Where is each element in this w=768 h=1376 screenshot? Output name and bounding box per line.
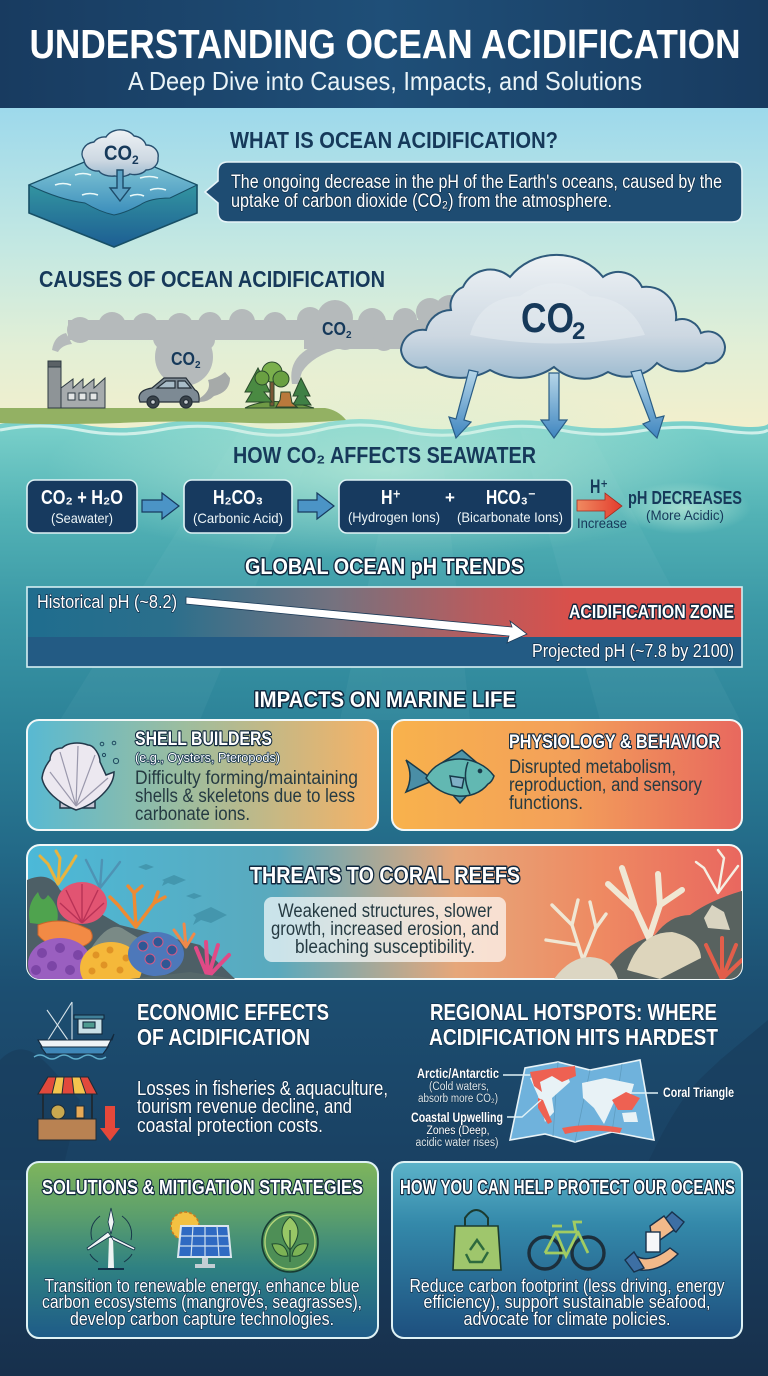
- icon: ocean cube with CO2 cloud: CO: [104, 142, 132, 165]
- heading: economic effects: [137, 999, 329, 1050]
- text box: coral threats: bleaching susceptibility.: [295, 937, 475, 958]
- chart: pH trend bar: [27, 587, 742, 667]
- heading: how CO2 affects seawater: HOW CO₂ AFFECTS SEAWATER: [233, 442, 536, 468]
- icon: solar panel and sun: [171, 1212, 231, 1268]
- label: coastal upwelling: Coastal Upwelling: [411, 1110, 503, 1125]
- economic effects text: Losses in fisheries & aquaculture,: [137, 1078, 388, 1100]
- text box: coral threats: Weakened structures, slower: [278, 901, 493, 922]
- box: carbonic acid: (Carbonic Acid): [193, 510, 283, 526]
- icon: factory: [48, 361, 105, 408]
- increase arrow with H+: H⁺: [590, 477, 608, 498]
- icon: fishing boat: [34, 1002, 114, 1059]
- background: sky: [0, 100, 768, 430]
- panel: solutions and mitigation: SOLUTIONS & MITIGATION STRATEGIES: [42, 1177, 363, 1199]
- icon: market stall with down arrow: [38, 1077, 120, 1141]
- callout: definition: uptake of carbon dioxide (CO₂) from the atmosphere.: [231, 191, 612, 212]
- text box: coral threats: growth, increased erosion, and: [271, 919, 499, 940]
- box: ions: (Hydrogen Ions): [348, 509, 440, 525]
- icon: ocean cube with CO2 cloud: [29, 130, 197, 247]
- increase arrow with H+: Increase: [577, 515, 627, 531]
- panel: how you can help: efficiency), support sustainable seafood,: [424, 1291, 710, 1312]
- heading: impacts on marine life: IMPACTS ON MARINE LIFE: [254, 687, 516, 712]
- economic effects text: tourism revenue decline, and: [137, 1096, 352, 1118]
- label: coral triangle: [630, 1085, 734, 1100]
- label: coastal upwelling: Zones (Deep,: [426, 1123, 490, 1137]
- box: carbonic acid: H₂CO₃: [213, 487, 263, 509]
- panel: shell builders: shells & skeletons due to less: [135, 786, 355, 807]
- result: pH decreases: (More Acidic): [646, 507, 724, 523]
- icon: voting hands: [625, 1212, 684, 1272]
- panel: threats to coral reefs: THREATS TO CORAL REEFS: [250, 862, 520, 888]
- increase arrow with H+: [577, 477, 627, 531]
- panel: physiology and behavior: Disrupted metabolism,: [509, 757, 676, 778]
- heading: global ocean pH trends: GLOBAL OCEAN pH TRENDS: [245, 554, 524, 579]
- panel: shell builders: Difficulty forming/maintaining: [135, 768, 358, 789]
- label: CO2 above car: CO: [171, 349, 195, 369]
- chart: pH trend bar: Projected pH (~7.8 by 2100): [532, 641, 734, 661]
- panel: solutions and mitigation: Transition to renewable energy, enhance blue: [44, 1275, 360, 1296]
- panel: shell builders: (e.g., Oysters, Pteropods): [135, 751, 280, 765]
- heading: regional hotspots: [429, 999, 718, 1050]
- map: regional hotspots: [510, 1060, 654, 1142]
- land strip: [0, 408, 346, 424]
- box: CO2 + H2O: CO₂ + H₂O: [41, 487, 123, 509]
- icon: reusable bag: [453, 1210, 501, 1270]
- label: arctic and antarctic: Arctic/Antarctic: [417, 1066, 499, 1081]
- label: coral triangle: Coral Triangle: [663, 1085, 734, 1100]
- arrows from cloud to ocean: [449, 370, 664, 438]
- box: ions: (Bicarbonate Ions): [457, 509, 563, 525]
- background: ocean: [0, 380, 768, 1376]
- heading: what is ocean acidification: WHAT IS OCEAN ACIDIFICATION?: [230, 127, 558, 153]
- panel: how you can help: [392, 1162, 742, 1338]
- label: CO2 in smoke: CO: [322, 319, 346, 339]
- arrow: [142, 493, 179, 519]
- panel: physiology and behavior: PHYSIOLOGY & BEHAVIOR: [509, 732, 720, 753]
- label: arctic and antarctic: absorb more CO₂): [418, 1093, 498, 1105]
- panel: how you can help: advocate for climate policies.: [464, 1308, 670, 1329]
- panel: physiology and behavior: functions.: [509, 793, 583, 814]
- icon: car: [139, 378, 199, 408]
- icon: wind turbine: [87, 1208, 135, 1269]
- panel: physiology and behavior: [392, 720, 742, 830]
- callout: definition: [205, 162, 742, 222]
- arrow: [298, 493, 334, 519]
- panel: shell builders: SHELL BUILDERS: [135, 729, 272, 750]
- label: CO2 above car: 2: [195, 360, 201, 371]
- label: arctic and antarctic: [417, 1066, 530, 1105]
- result: pH decreases: pH DECREASES: [628, 488, 742, 508]
- subtitle: A Deep Dive into Causes, Impacts, and Solutions: [128, 66, 642, 96]
- label: coastal upwelling: acidic water rises): [416, 1137, 499, 1149]
- box: ions: [339, 480, 572, 533]
- panel: how you can help: Reduce carbon footprint (less driving, energy: [410, 1275, 725, 1296]
- big CO2 cloud: [401, 255, 725, 379]
- icon: bicycle: [529, 1222, 604, 1269]
- panel: physiology and behavior: reproduction, and sensory: [509, 775, 702, 796]
- panel: solutions and mitigation: carbon ecosystems (mangroves, seagrasses),: [42, 1291, 362, 1312]
- heading: regional hotspots: ACIDIFICATION HITS HARDEST: [429, 1024, 718, 1050]
- big CO2 cloud: CO: [521, 294, 574, 341]
- panel: solutions and mitigation: develop carbon capture technologies.: [70, 1308, 334, 1329]
- bleached reef illustration: [546, 850, 745, 979]
- result: pH decreases: [619, 482, 751, 534]
- icon: plant in circle: [262, 1212, 318, 1272]
- icon: fish: [406, 750, 494, 803]
- text box: coral threats: [264, 897, 506, 962]
- box: CO2 + H2O: (Seawater): [51, 510, 113, 526]
- heading: causes: CAUSES OF OCEAN ACIDIFICATION: [39, 266, 385, 292]
- smoke trail: [52, 295, 465, 402]
- label: coastal upwelling: [411, 1100, 541, 1149]
- icon: trees and stump: [245, 362, 314, 408]
- panel: solutions and mitigation: [27, 1162, 378, 1338]
- economic effects text: coastal protection costs.: [137, 1115, 323, 1137]
- icon: ocean cube with CO2 cloud: 2: [132, 153, 139, 167]
- box: ions: +: [445, 488, 455, 507]
- panel: threats to coral reefs: [27, 845, 745, 994]
- heading: economic effects: ECONOMIC EFFECTS: [137, 999, 329, 1025]
- chart: pH trend bar: Historical pH (~8.2): [37, 592, 177, 612]
- box: ions: H⁺: [381, 487, 401, 509]
- box: ions: HCO₃⁻: [486, 487, 536, 509]
- chart: pH trend bar: ACIDIFICATION ZONE: [569, 602, 734, 622]
- label: CO2 in smoke: 2: [346, 330, 352, 341]
- box: CO2 + H2O: [27, 480, 137, 533]
- healthy reef illustration: [27, 851, 235, 994]
- header banner: [0, 0, 768, 108]
- icon: damaged shell: [42, 741, 119, 810]
- heading: economic effects: OF ACIDIFICATION: [137, 1024, 310, 1050]
- box: carbonic acid: [184, 480, 292, 533]
- panel: shell builders: carbonate ions.: [135, 804, 250, 825]
- big CO2 cloud: 2: [572, 318, 585, 345]
- panel: shell builders: [27, 720, 378, 830]
- label: arctic and antarctic: (Cold waters,: [429, 1081, 489, 1093]
- economic effects text: [137, 1078, 388, 1137]
